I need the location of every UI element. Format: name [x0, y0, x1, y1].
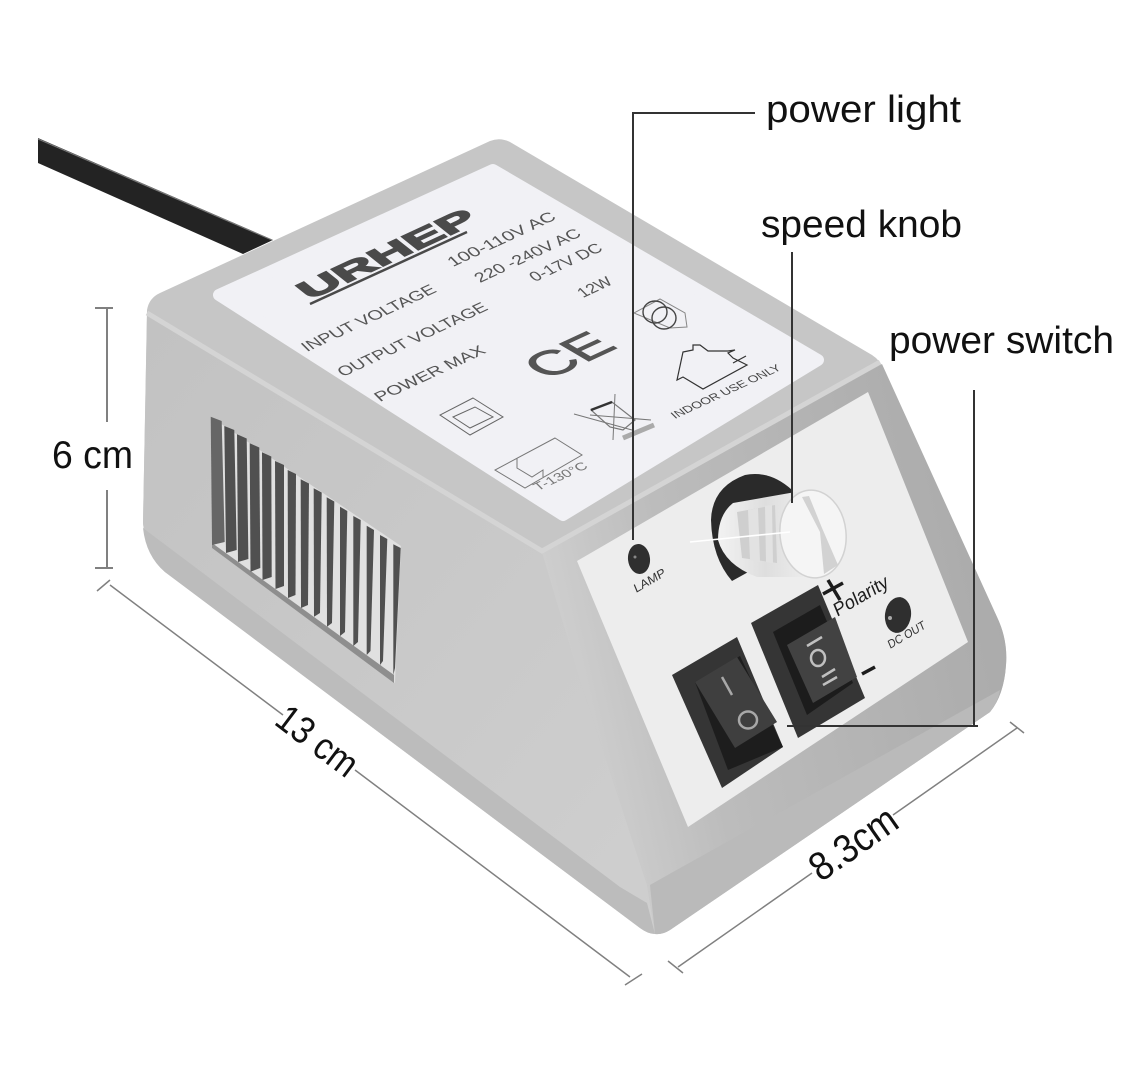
label background — [219, 170, 818, 515]
spec table: 220 -240V AC — [471, 226, 585, 286]
callout: power switch — [787, 320, 1114, 726]
ventilation grille — [211, 417, 401, 683]
spec table: OUTPUT VOLTAGE — [334, 300, 492, 380]
dimension: width 8.3cm — [668, 722, 1024, 973]
icon: double insulation square — [440, 398, 503, 435]
dimension: width 8.3cm: 8.3cm — [801, 798, 906, 890]
icon: crossed-out bin — [574, 394, 654, 440]
vent slots — [211, 417, 401, 675]
power rocker switch — [672, 637, 783, 788]
front face — [542, 364, 1006, 934]
top bezel ridge — [147, 313, 880, 551]
DC out socket — [883, 595, 928, 652]
lamp indicator: LAMP — [632, 565, 667, 596]
spec table: 0-17V DC — [526, 241, 607, 285]
callout: power light — [633, 89, 961, 540]
icon: indoor house: INDOOR USE ONLY — [669, 363, 785, 421]
dimension: length 13 cm — [97, 580, 642, 985]
device body — [143, 139, 1006, 934]
control panel — [577, 392, 968, 827]
spec table — [298, 210, 617, 405]
brand logo: URHEP: URHEP — [288, 204, 486, 304]
spec table: POWER MAX — [371, 343, 490, 405]
vent floor — [212, 543, 394, 683]
callout: power light: power light — [766, 89, 961, 131]
dimension: height 6 cm: 6 cm — [52, 434, 133, 477]
spec table: 100-110V AC — [444, 210, 560, 270]
spec table: 12W — [574, 275, 617, 301]
brand logo: URHEP — [288, 204, 486, 304]
front bottom bevel — [650, 690, 1000, 934]
icon: thermal fuse: T-130°C — [530, 459, 591, 493]
side face — [143, 315, 655, 934]
power cord — [38, 138, 273, 254]
callout: speed knob: speed knob — [761, 204, 962, 246]
speed knob — [690, 487, 850, 581]
polarity mark: Polarity — [831, 571, 892, 622]
callout: power switch: power switch — [889, 320, 1114, 362]
icon: transformer shield — [634, 299, 687, 329]
spec table: INPUT VOLTAGE — [298, 282, 440, 355]
vent backing — [211, 417, 401, 683]
DC out socket: DC OUT — [886, 617, 928, 652]
panel background — [577, 392, 968, 827]
rating label panel — [219, 170, 818, 515]
knob collar — [711, 474, 792, 581]
icon: thermal fuse — [495, 438, 591, 493]
dimension: length 13 cm: 13 cm — [267, 697, 366, 786]
CE mark: CE — [509, 325, 628, 386]
polarity rocker switch — [751, 585, 865, 738]
body silhouette and top bezel — [143, 139, 1006, 934]
side bottom bevel — [143, 528, 655, 934]
polarity mark — [823, 571, 892, 674]
icon: indoor house — [669, 345, 785, 421]
dimension: height 6 cm — [52, 308, 133, 568]
lamp indicator — [626, 543, 667, 596]
